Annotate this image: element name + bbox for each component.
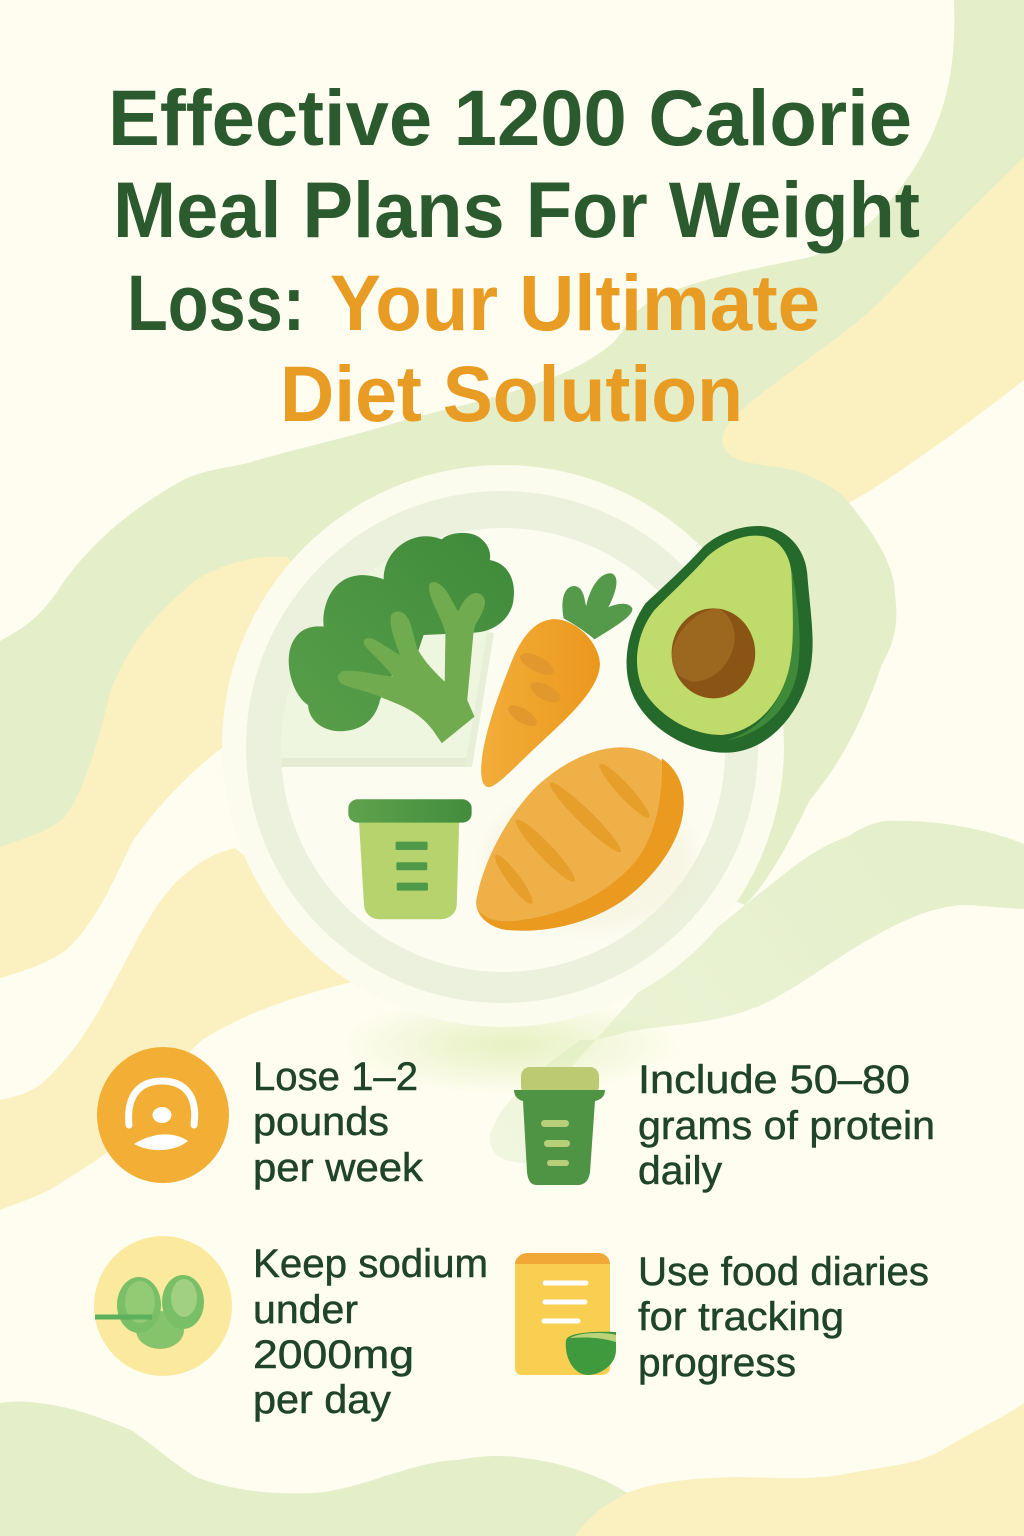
text: daily bbox=[638, 1149, 722, 1193]
text: pounds bbox=[253, 1100, 389, 1144]
title: Meal Plans For Weight bbox=[113, 165, 920, 254]
icon: diary and bowl bbox=[515, 1253, 616, 1375]
text: per week bbox=[253, 1146, 424, 1190]
food shadow bbox=[485, 790, 695, 930]
title: Loss: bbox=[127, 258, 305, 347]
avocado bbox=[627, 526, 813, 753]
chicken breast bbox=[476, 747, 684, 931]
benefit: lose pounds bbox=[97, 1047, 424, 1190]
text: progress bbox=[638, 1341, 796, 1385]
text bbox=[253, 1055, 424, 1190]
text: under bbox=[253, 1288, 358, 1332]
text: per day bbox=[253, 1378, 391, 1422]
plate bbox=[222, 465, 784, 1027]
title: Diet Solution bbox=[280, 349, 743, 438]
benefit: sodium bbox=[94, 1236, 488, 1422]
icon: orange person bbox=[97, 1047, 229, 1183]
text: Lose 1–2 bbox=[253, 1055, 418, 1099]
text: grams of protein bbox=[638, 1104, 935, 1148]
plate illustration bbox=[222, 465, 813, 1027]
benefit: food diary bbox=[515, 1250, 929, 1385]
text bbox=[638, 1250, 929, 1385]
carrot bbox=[481, 573, 632, 787]
text: for tracking bbox=[638, 1295, 844, 1339]
text: Keep sodium bbox=[253, 1242, 488, 1286]
benefit: protein bbox=[514, 1058, 935, 1193]
title: Effective 1200 Calorie bbox=[108, 73, 912, 162]
foods in zoomed coordinates bbox=[289, 526, 813, 931]
text bbox=[253, 1242, 488, 1422]
text bbox=[638, 1058, 935, 1193]
icon: green leaves on yellow circle bbox=[94, 1236, 232, 1376]
text: 2000mg bbox=[253, 1333, 414, 1377]
icon: shaker bbox=[514, 1067, 605, 1185]
measuring cup bbox=[348, 799, 472, 919]
title bbox=[108, 73, 920, 438]
broccoli bbox=[289, 533, 514, 743]
text: Use food diaries bbox=[638, 1250, 929, 1294]
text: Include 50–80 bbox=[638, 1058, 910, 1102]
title: Your Ultimate bbox=[330, 258, 820, 347]
